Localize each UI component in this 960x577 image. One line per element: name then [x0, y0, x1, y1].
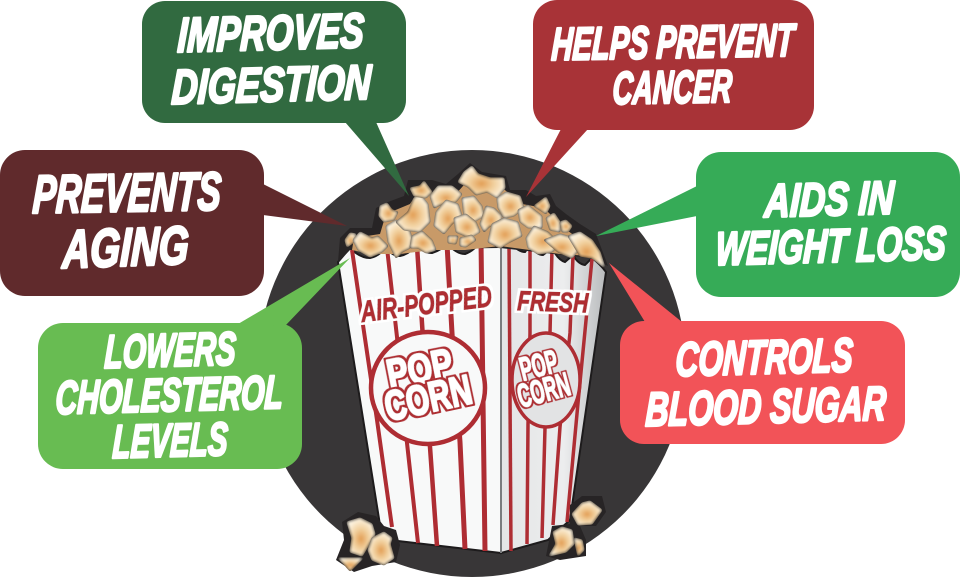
callout: improves digestion: IMPROVES [177, 4, 365, 63]
callout: lowers cholesterol levels: LOWERS [104, 322, 237, 378]
pile tan underlay [352, 178, 600, 262]
callout: lowers cholesterol levels [38, 258, 350, 469]
side popcorn badge: POP [516, 343, 562, 388]
callout: helps prevent cancer: CANCER [611, 60, 733, 114]
callout: aids in weight loss: AIDS IN [763, 171, 896, 227]
side popcorn badge: CORN [513, 365, 574, 415]
air-popped label: AIR-POPPED [358, 280, 494, 329]
callout: helps prevent cancer: HELPS PREVENT [550, 14, 798, 70]
bottom right spilled popcorn [546, 496, 606, 560]
box fold [500, 247, 502, 553]
callout: lowers cholesterol levels: LEVELS [112, 412, 229, 468]
callout: prevents aging: PREVENTS [31, 162, 223, 225]
fresh label: FRESH [517, 285, 589, 318]
red stripes [352, 241, 592, 551]
callout: prevents aging: AGING [60, 216, 190, 280]
popcorn box [338, 240, 606, 553]
popcorn pile [338, 163, 608, 268]
box side panel [501, 242, 606, 553]
callout: aids in weight loss [596, 152, 960, 297]
callout: improves digestion: DIGESTION [171, 56, 373, 115]
callout: controls blood sugar [609, 263, 905, 444]
bottom left spilled popcorn [336, 512, 400, 572]
kernels [345, 166, 605, 268]
front popcorn badge: CORN [380, 366, 476, 430]
callout: controls blood sugar: CONTROLS [675, 329, 854, 387]
front popcorn badge [371, 332, 485, 444]
callout: lowers cholesterol levels: CHOLESTEROL [55, 365, 284, 424]
callout: helps prevent cancer [526, 0, 814, 197]
callout: improves digestion [142, 1, 409, 196]
side popcorn badge [512, 333, 580, 427]
front popcorn badge: POP [383, 339, 457, 398]
pile dark outline [338, 163, 608, 266]
box front panel [338, 240, 501, 553]
dark background circle [258, 150, 686, 577]
callout: prevents aging [0, 150, 347, 296]
